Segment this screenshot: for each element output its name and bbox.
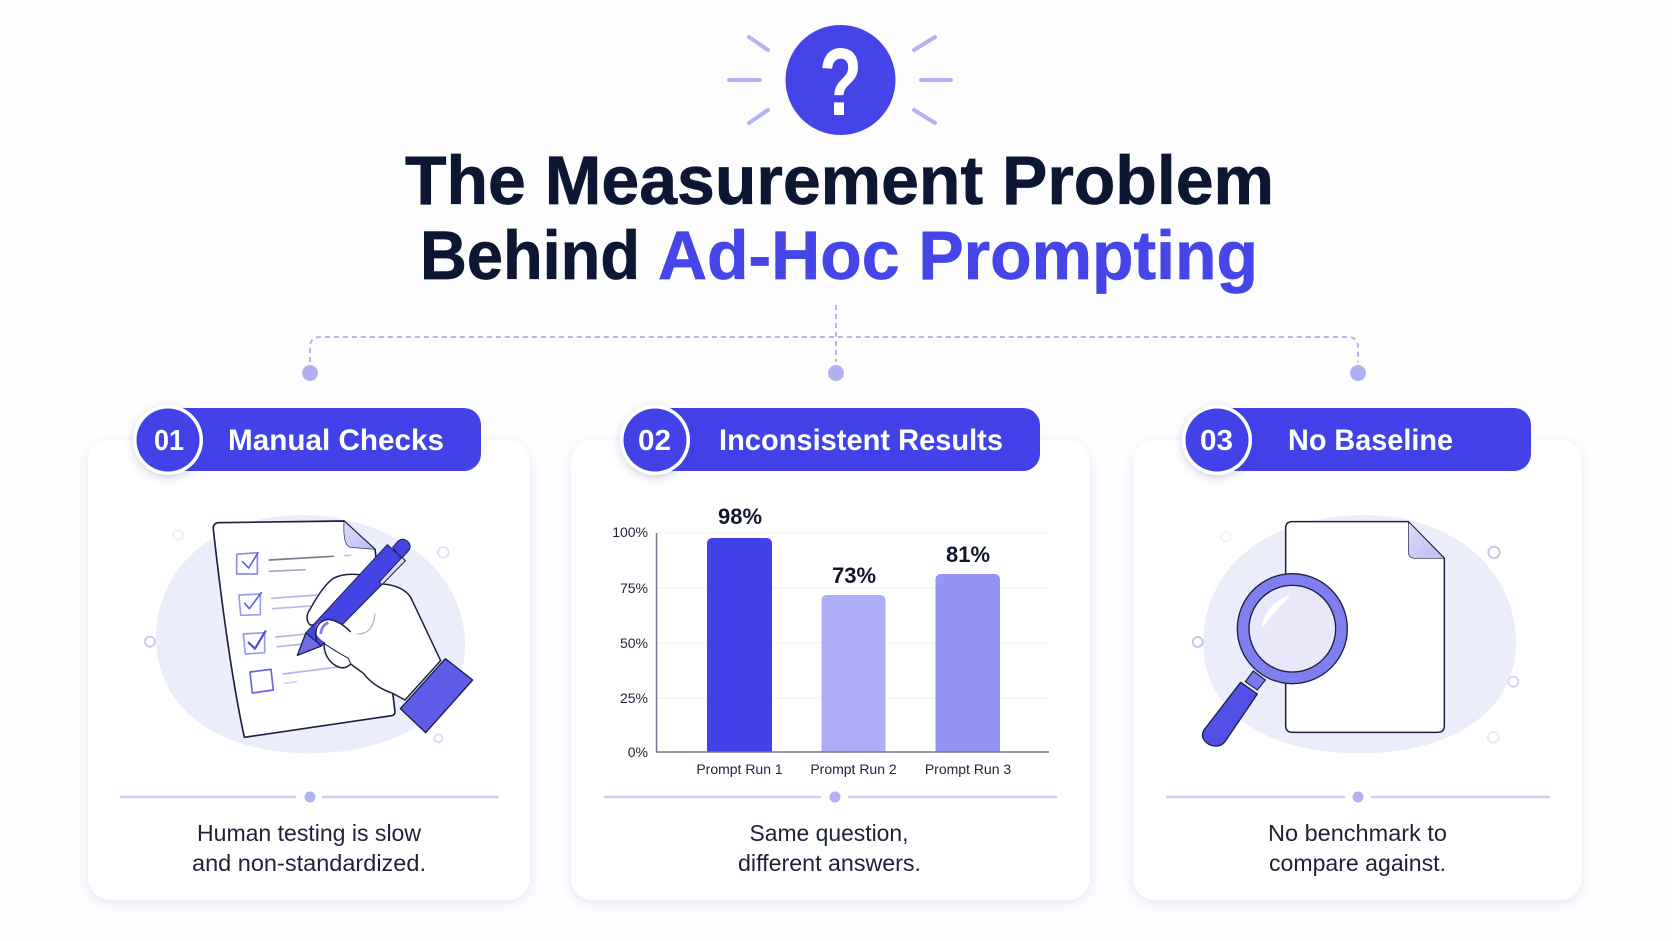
title: Ad-Hoc Prompting [658,217,1258,294]
panel: manual checks [88,405,530,900]
bar: prompt run 3 [936,574,1000,752]
value labels: 73% [832,563,876,588]
axis labels: 25% [620,690,648,706]
axis labels: 75% [620,580,648,596]
panel background: manual checks [88,440,530,900]
caption: manual checks [192,820,426,876]
title [405,142,1274,294]
caption: inconsistent results: Same question, [750,820,908,846]
header: 01 manual checks: 01 [154,425,184,457]
bar: prompt run 2 [822,595,886,752]
header: 01 manual checks: Manual Checks [228,424,444,457]
category labels: Prompt Run 3 [925,761,1011,777]
divider [1166,792,1550,802]
illustration: hand ticking a checklist [145,515,473,753]
category labels [696,761,1011,777]
icon: question mark with rays [729,25,951,136]
bar chart [612,504,1049,777]
axis labels: 0% [628,744,648,760]
divider [604,792,1057,802]
header: 03 no baseline: 03 [1200,425,1233,457]
header: 01 manual checks [133,405,481,475]
title: The Measurement Problem [405,142,1274,219]
value labels: 98% [718,504,762,529]
caption: manual checks: and non-standardized. [192,850,426,876]
caption: inconsistent results: different answers. [738,850,921,876]
header: 03 no baseline: No Baseline [1288,424,1453,457]
panel background: inconsistent results [571,440,1090,900]
illustration: magnifier over blank document [1193,515,1518,753]
bar: prompt run 1 [707,538,772,752]
title: Behind [420,217,640,294]
value labels [718,504,990,588]
axis labels [612,524,648,760]
shirt cuff [400,659,473,733]
caption: no baseline: compare against. [1269,850,1446,876]
divider [120,792,499,802]
index finger [315,619,351,643]
caption: inconsistent results [738,820,921,876]
axis labels: 100% [612,524,648,540]
category labels: Prompt Run 2 [810,761,897,777]
hand [307,574,441,700]
connector tree [302,305,1366,381]
pen [297,633,321,655]
panel background: no baseline [1133,440,1582,900]
value labels: 81% [946,542,990,567]
panel: inconsistent results [571,405,1090,900]
panel: no baseline [1133,405,1582,900]
icon: question mark with rays: ? [819,29,862,136]
category labels: Prompt Run 1 [696,761,783,777]
header: 02 inconsistent results: 02 [638,425,671,457]
header: 02 inconsistent results: Inconsistent Results [719,424,1003,457]
caption: no baseline: No benchmark to [1268,820,1447,846]
caption: no baseline [1268,820,1447,876]
header: 02 inconsistent results [620,405,1040,475]
caption: manual checks: Human testing is slow [197,820,421,846]
header: 03 no baseline [1182,405,1531,475]
axis labels: 50% [620,635,648,651]
